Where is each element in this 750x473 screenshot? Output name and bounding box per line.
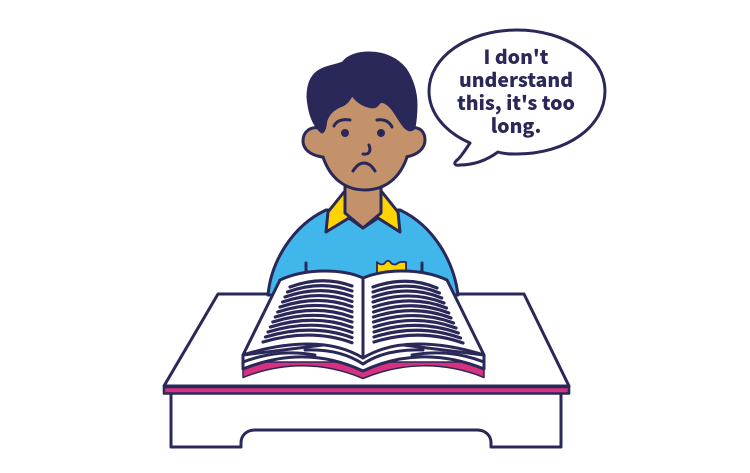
right page: [363, 271, 484, 358]
desk: [164, 294, 569, 447]
left page: [243, 271, 363, 358]
collar: [326, 192, 400, 232]
right page text lines: [373, 281, 463, 343]
speech bubble: [429, 30, 605, 165]
left page text lines: [263, 281, 352, 343]
speech text: long.: [491, 110, 541, 139]
hair: [308, 53, 416, 132]
open book: [243, 271, 484, 378]
pink cover: [243, 362, 484, 378]
nose: [363, 145, 370, 154]
sleeve creases: [306, 263, 422, 272]
eyebrows: [334, 120, 392, 127]
torso with blue shirt: [268, 210, 458, 295]
boy: [268, 53, 458, 295]
speech text: I don't: [484, 41, 549, 70]
neck: [345, 180, 381, 228]
face: [318, 90, 411, 190]
speech text: this, it's too: [457, 87, 575, 116]
speech text: understand: [459, 64, 573, 93]
sad mouth: [353, 163, 375, 171]
shirt pocket: [377, 261, 406, 276]
page block: [243, 340, 484, 371]
ears: [303, 128, 425, 157]
eyes: [342, 130, 348, 136]
